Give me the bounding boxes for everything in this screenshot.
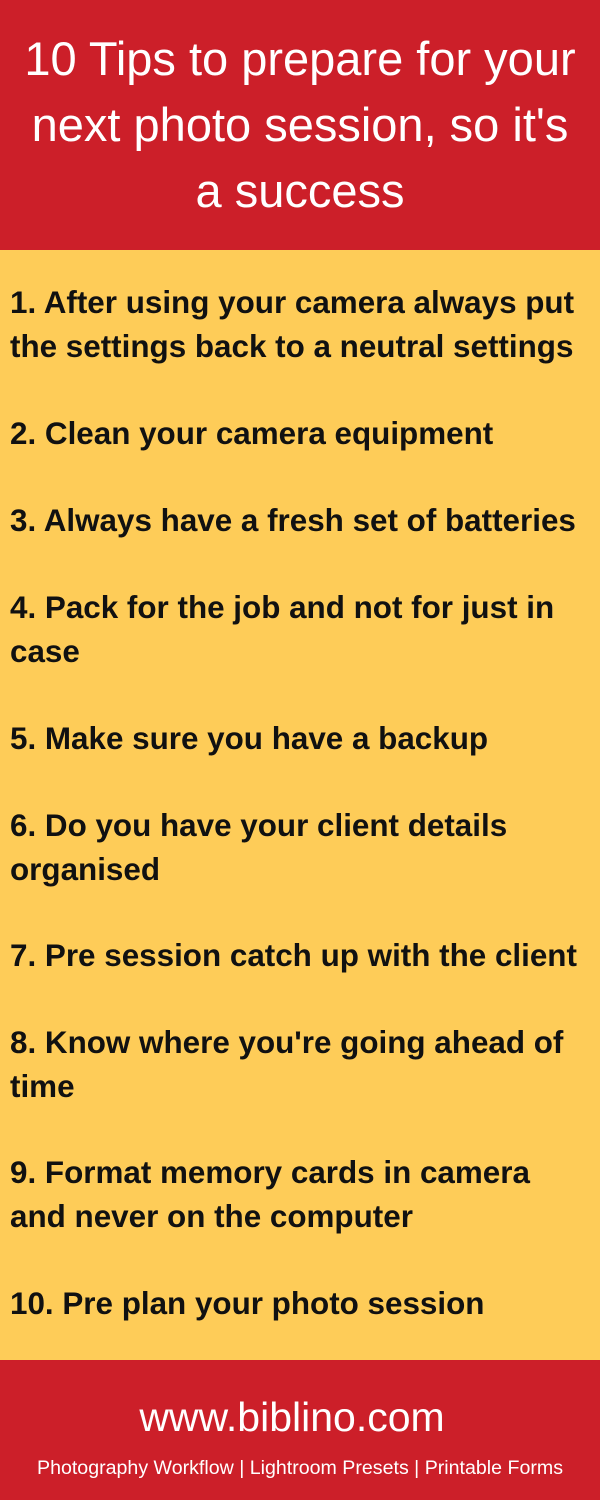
tip 1: the settings back to a neutral settings [10, 329, 573, 364]
website url: www.biblino.com [139, 1394, 445, 1440]
tip 3: 3. Always have a fresh set of batteries [10, 503, 576, 538]
tip 1 [10, 285, 574, 364]
tip 2: 2. Clean your camera equipment [10, 416, 493, 451]
title: 10 Tips to prepare for your [24, 32, 576, 85]
tip 7: 7. Pre session catch up with the client [10, 938, 577, 973]
title: next photo session, so it's [32, 98, 568, 151]
title [24, 32, 576, 217]
footer [0, 1360, 600, 1500]
tip 4: case [10, 634, 80, 669]
tip 10: 10. Pre plan your photo session [10, 1286, 484, 1321]
tip 8: time [10, 1069, 75, 1104]
tip 6: 6. Do you have your client details [10, 808, 507, 843]
tip 8 [10, 1025, 564, 1104]
tip 6 [10, 808, 507, 887]
header [0, 0, 600, 250]
tip 8: 8. Know where you're going ahead of [10, 1025, 563, 1060]
tip 4 [10, 590, 554, 669]
title: a success [196, 164, 404, 217]
tip 6: organised [10, 852, 160, 887]
tip 4: 4. Pack for the job and not for just in [10, 590, 554, 625]
tip 9: and never on the computer [10, 1199, 413, 1234]
footer tagline: Photography Workflow | Lightroom Presets | Printable Forms [37, 1457, 563, 1479]
tip 5: 5. Make sure you have a backup [10, 721, 488, 756]
tip 9: 9. Format memory cards in camera [10, 1155, 530, 1190]
tip 1: 1. After using your camera always put [10, 285, 574, 320]
tip 9 [10, 1155, 530, 1234]
